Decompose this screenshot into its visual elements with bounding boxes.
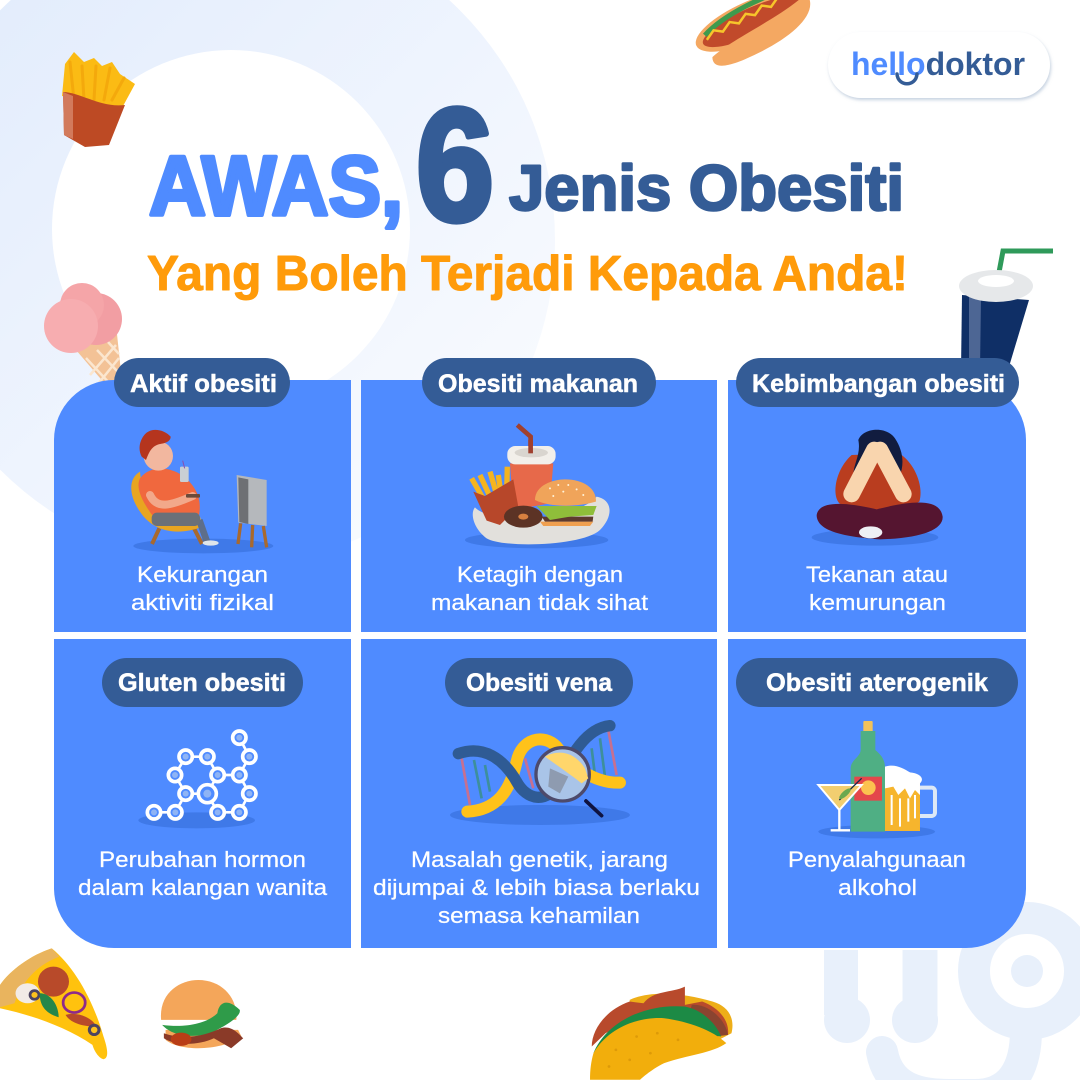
illustration: fast food plate	[465, 425, 610, 548]
icon: pizza slice	[0, 948, 107, 1059]
illustration: man watching tv	[131, 430, 273, 553]
description	[78, 847, 328, 900]
description: kemurungan	[809, 590, 946, 615]
card background	[361, 380, 717, 632]
panel: Obesiti vena	[361, 639, 717, 948]
icon: taco	[590, 987, 732, 1080]
card background	[54, 639, 351, 948]
pill: Obesiti aterogenik	[736, 658, 1018, 707]
description: Kekurangan	[137, 562, 268, 587]
pill: Kebimbangan obesiti: Kebimbangan obesiti	[752, 370, 1005, 398]
card background	[728, 639, 1026, 948]
subtitle: Yang Boleh Terjadi Kepada Anda!	[147, 247, 908, 301]
icon: hot dog	[688, 0, 821, 75]
description	[131, 562, 274, 615]
pill: Gluten obesiti	[102, 658, 303, 707]
pill: Aktif obesiti: Aktif obesiti	[130, 370, 277, 398]
pill: Aktif obesiti	[114, 358, 290, 407]
description: alkohol	[838, 875, 917, 900]
description: semasa kehamilan	[438, 903, 640, 928]
illustration: stressed woman	[812, 430, 943, 546]
panel: Gluten obesiti	[54, 639, 351, 948]
card background	[728, 380, 1026, 632]
description: Perubahan hormon	[99, 847, 306, 872]
description: Masalah genetik, jarang	[411, 847, 668, 872]
panel: Kebimbangan obesiti	[728, 358, 1026, 632]
description: makanan tidak sihat	[431, 590, 648, 615]
pill: Obesiti makanan	[422, 358, 656, 407]
logo text: hellodoktor	[851, 46, 1025, 82]
logo pill	[828, 32, 1050, 98]
background: pale blue circle	[0, 0, 555, 565]
description	[373, 847, 700, 928]
pill: Obesiti vena	[445, 658, 633, 707]
icon: ice cream	[44, 283, 122, 392]
background: white inner circle	[52, 50, 410, 408]
illustration: dna and magnifier	[450, 726, 630, 825]
pill: Obesiti vena: Obesiti vena	[466, 669, 613, 697]
description: aktiviti fizikal	[131, 590, 274, 615]
pill: Kebimbangan obesiti	[736, 358, 1019, 407]
card background	[361, 639, 717, 948]
watermark: hello logo fragment	[824, 918, 1080, 1080]
pill: Obesiti makanan: Obesiti makanan	[438, 370, 638, 398]
pill: Gluten obesiti: Gluten obesiti	[118, 669, 286, 697]
description	[431, 562, 648, 615]
title: 6: 6	[416, 75, 494, 254]
description: Ketagih dengan	[457, 562, 623, 587]
description	[788, 847, 966, 900]
illustration: alcohol drinks	[818, 721, 935, 838]
card background	[54, 380, 351, 632]
panel: Obesiti makanan	[361, 358, 717, 632]
panel: Obesiti aterogenik	[728, 639, 1026, 948]
title: Jenis Obesiti: Jenis Obesiti	[509, 152, 904, 224]
icon: fries	[62, 52, 135, 147]
illustration: gluten molecule	[138, 731, 256, 828]
description: dalam kalangan wanita	[78, 875, 328, 900]
description: dijumpai & lebih biasa berlaku	[373, 875, 700, 900]
icon: burger	[161, 980, 243, 1048]
description	[806, 562, 948, 615]
title: AWAS,: AWAS,	[149, 139, 403, 233]
title	[147, 75, 908, 301]
description: Penyalahgunaan	[788, 847, 966, 872]
description: Tekanan atau	[806, 562, 948, 587]
panel: Aktif obesiti	[54, 358, 351, 632]
pill: Obesiti aterogenik: Obesiti aterogenik	[766, 669, 988, 697]
icon: soft drink cup	[959, 251, 1053, 370]
logo stethoscope curve	[897, 74, 917, 84]
